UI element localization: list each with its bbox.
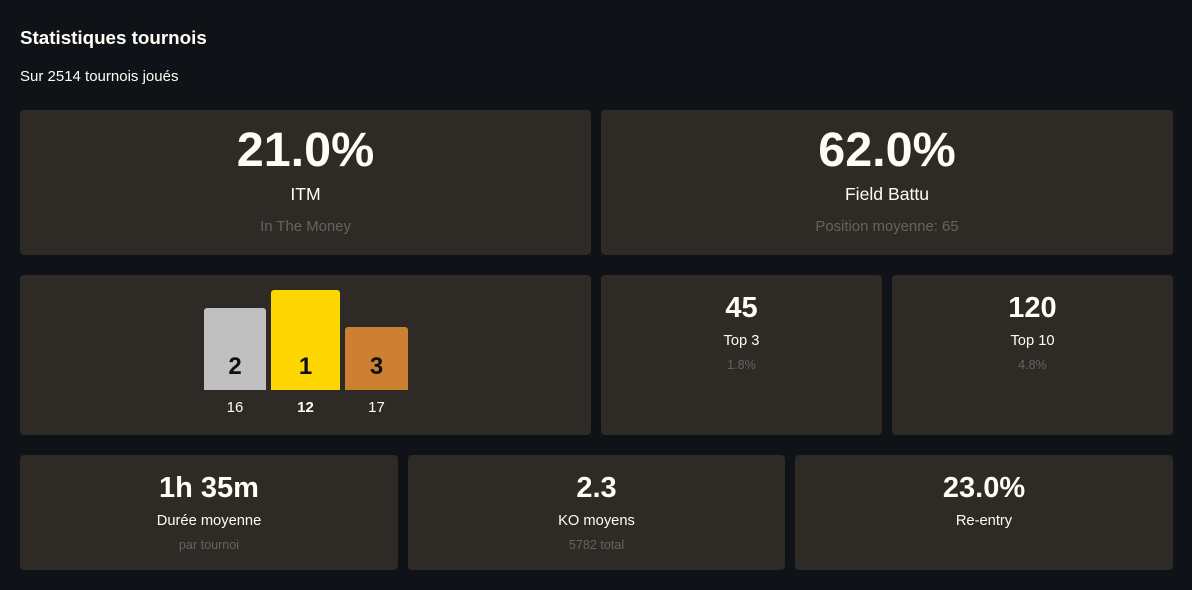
Durée note: par tournoi [179, 538, 239, 552]
podium chart [204, 290, 408, 390]
Top 3 note: 1.8% [727, 358, 756, 372]
ITM note: In The Money [260, 219, 351, 235]
bar: third place [345, 327, 408, 390]
bar: second place: 2 [228, 353, 242, 380]
ITM label: ITM [290, 184, 321, 204]
panel: KO moyens [408, 455, 785, 570]
Top 10 note: 4.8% [1018, 358, 1047, 372]
Field Battu label: Field Battu [845, 184, 929, 204]
panel: Durée moyenne [20, 455, 398, 570]
KO label: KO moyens [558, 513, 635, 529]
title: Statistiques tournois [20, 27, 207, 48]
bar: second place [204, 308, 266, 390]
Top 3 value: 45 [725, 292, 758, 324]
Durée value: 1h 35m [159, 472, 259, 504]
subtitle: Sur 2514 tournois joués [20, 68, 178, 85]
KO note: 5782 total [569, 538, 624, 552]
Re-entry label: Re-entry [956, 513, 1012, 529]
Re-entry value: 23.0% [943, 472, 1025, 504]
panel: Top 3 [601, 275, 882, 435]
panel: ITM [20, 110, 591, 255]
Top 10 label: Top 10 [1010, 333, 1055, 349]
bar: first place: 1 [299, 353, 312, 380]
count: first place: 12 [297, 399, 314, 416]
count: third place: 17 [368, 399, 385, 416]
bar: third place: 3 [370, 353, 383, 380]
panel: Top 10 [892, 275, 1173, 435]
Durée label: Durée moyenne [157, 513, 261, 529]
Top 3 label: Top 3 [724, 333, 759, 349]
bar: first place [271, 290, 340, 390]
count: second place: 16 [227, 399, 243, 416]
Field Battu value: 62.0% [818, 123, 956, 177]
panel: Field Battu [601, 110, 1173, 255]
Top 10 value: 120 [1008, 292, 1057, 324]
Field Battu note: Position moyenne: 65 [815, 219, 959, 235]
panel: Re-entry [795, 455, 1173, 570]
ITM value: 21.0% [237, 123, 374, 177]
panel: podium [20, 275, 591, 435]
KO value: 2.3 [576, 472, 617, 504]
